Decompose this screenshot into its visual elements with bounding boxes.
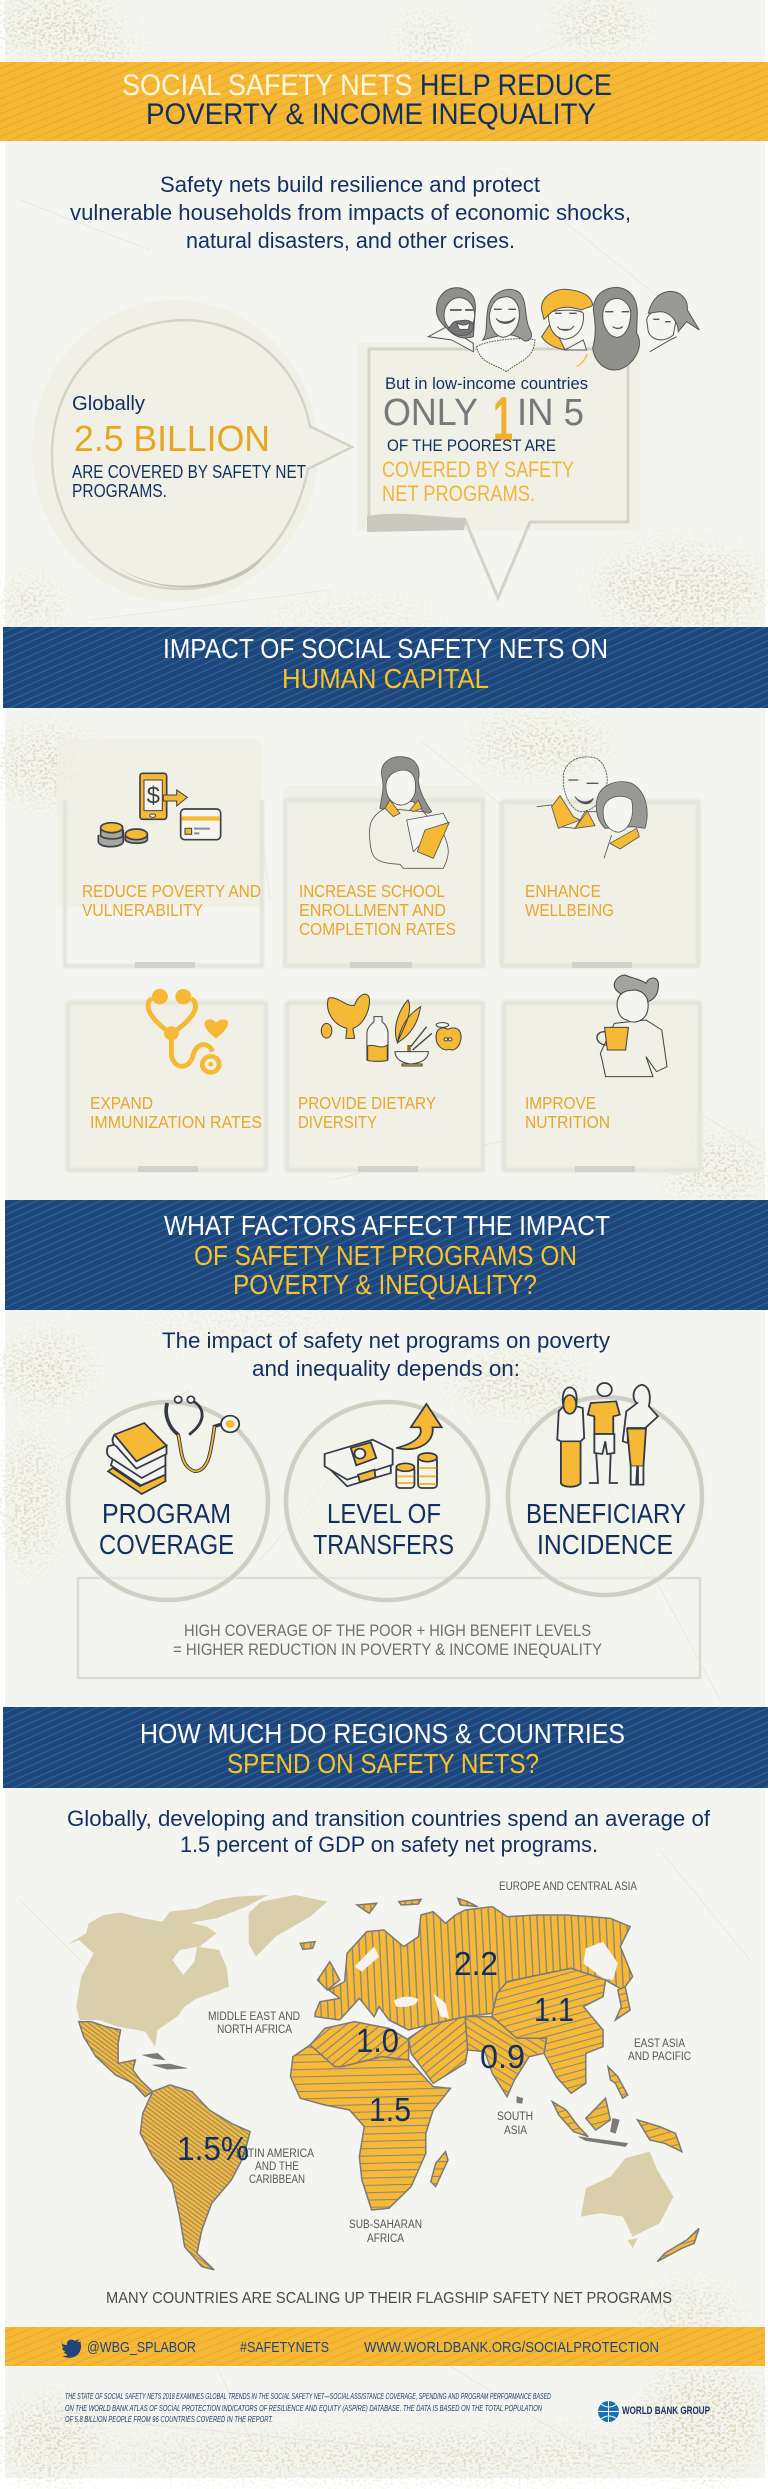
text: covered yellow: COVERED BY SAFETY (382, 457, 574, 482)
world map (66, 1895, 699, 2270)
map: North America, Greenland, Australia (66, 1895, 673, 2248)
label: LEVEL OF (327, 1498, 441, 1529)
intro: spending: 1.5 percent of GDP on safety net programs. (180, 1832, 598, 1857)
text: only 1 in 5: 1 (493, 385, 513, 454)
map labels: AFRICA (367, 2233, 404, 2245)
icon: cash, coins, arrow (325, 1404, 442, 1488)
label (299, 881, 456, 939)
text: scaling up: MANY COUNTRIES ARE SCALING UP THEIR FLAGSHIP SAFETY NET PROGRAMS (106, 2290, 672, 2307)
callout: global coverage bubble (32, 300, 352, 602)
panel: program coverage (63, 1396, 273, 1603)
face: headscarf woman (647, 291, 699, 352)
map labels: LATIN AMERICA (236, 2148, 314, 2160)
title line 1: SOCIAL SAFETY NETS HELP REDUCE (122, 69, 612, 102)
icon: food group (321, 994, 461, 1066)
intro text: vulnerable households from impacts of economic shocks, (70, 200, 631, 225)
panel: level of transfers (282, 1398, 492, 1604)
footer band (5, 2327, 765, 2366)
callout: low-income speech bubble (357, 343, 640, 598)
label: COMPLETION RATES (299, 919, 456, 939)
map labels: NORTH AFRICA (217, 2024, 292, 2036)
map labels: SOUTH (497, 2111, 533, 2123)
label: EXPAND (90, 1093, 153, 1113)
banner: title (0, 62, 768, 141)
heading line 2: OF SAFETY NET PROGRAMS ON (194, 1240, 577, 1271)
map: Europe and Central Asia 2.2 (300, 1898, 633, 2030)
map: South Asia 0.9 (465, 2017, 546, 2103)
icon: books and stethoscope (107, 1396, 239, 1494)
label: TRANSFERS (313, 1529, 454, 1560)
map labels (208, 1881, 691, 2245)
intro: spending (67, 1806, 711, 1857)
map: Africa 1.5 (290, 2045, 450, 2210)
map values: 0.9 (480, 2038, 525, 2075)
logo: World Bank Group (598, 2401, 710, 2422)
panel: school enrollment (283, 757, 485, 968)
label: ENROLLMENT AND (299, 900, 446, 920)
icon: girl with books (369, 757, 449, 868)
icon: three people (557, 1383, 658, 1487)
icon: five faces (428, 287, 699, 372)
label: IMPROVE (525, 1093, 596, 1113)
face: yellow turban (542, 289, 593, 350)
panel: improve nutrition (500, 975, 702, 1173)
label (90, 1093, 262, 1132)
map values (177, 1945, 574, 2167)
map: Latin America 1.5% (79, 2022, 250, 2270)
label: VULNERABILITY (82, 900, 203, 920)
face: woman in hijab (593, 287, 639, 370)
label: PROVIDE DIETARY (298, 1093, 436, 1113)
map: Middle East and North Africa 1.0 (310, 2017, 468, 2083)
label: BENEFICIARY (526, 1498, 686, 1529)
fine print: ON THE WORLD BANK ATLAS OF SOCIAL PROTECTION INDICATORS OF RESILIENCE AND EQUITY (ASPIRE) DATABASE. THE DATA IS BASED ON THE TOTAL POPULATION (65, 2403, 543, 2413)
map: East Asia and Pacific 1.1 (492, 1968, 699, 2262)
label: NUTRITION (525, 1112, 610, 1132)
handles: WWW.WORLDBANK.ORG/SOCIALPROTECTION (364, 2339, 659, 2356)
formula text: HIGH COVERAGE OF THE POOR + HIGH BENEFIT LEVELS (184, 1621, 591, 1640)
intro: spending: Globally, developing and transition countries spend an average of (67, 1806, 711, 1831)
panel: dietary diversity (283, 994, 485, 1173)
banner: spending (3, 1707, 768, 1788)
map labels: ASIA (504, 2125, 527, 2137)
heading line 2: HUMAN CAPITAL (282, 663, 489, 694)
label: DIVERSITY (298, 1112, 377, 1132)
heading line 1: WHAT FACTORS AFFECT THE IMPACT (164, 1210, 610, 1241)
label: PROGRAM (102, 1498, 231, 1529)
map values: 1.5% (177, 2130, 249, 2167)
label (298, 1093, 436, 1132)
text: covered: PROGRAMS. (72, 481, 167, 501)
icon: money transfer (98, 773, 221, 847)
banner: human capital (3, 627, 768, 708)
intro text: Safety nets build resilience and protect (160, 172, 540, 197)
label (99, 1498, 234, 1560)
label (525, 881, 614, 920)
text: covered yellow (382, 457, 574, 506)
formula text: = HIGHER REDUCTION IN POVERTY & INCOME INEQUALITY (173, 1640, 602, 1659)
swoosh accent (577, 354, 587, 367)
face: man with beard (428, 288, 475, 352)
label: WELLBEING (525, 900, 614, 920)
icon: stethoscope and heart (148, 991, 228, 1072)
logo: World Bank Group: WORLD BANK GROUP (622, 2405, 710, 2417)
face: smiling woman (477, 289, 535, 372)
text: only 1 in 5 (383, 385, 584, 454)
text: only 1 in 5: IN 5 (517, 392, 584, 434)
map values: 1.5 (369, 2091, 411, 2128)
label: INCIDENCE (537, 1529, 673, 1560)
label (525, 1093, 610, 1132)
fine print (65, 2391, 551, 2424)
map labels: AND PACIFIC (628, 2051, 691, 2063)
text: covered: ARE COVERED BY SAFETY NET (72, 462, 306, 482)
handles: @WBG_SPLABOR (87, 2339, 196, 2356)
handles (87, 2339, 659, 2356)
label: INCREASE SCHOOL (299, 881, 445, 901)
panel: expand immunization (64, 991, 268, 1173)
fine print: OF 5.8 BILLION PEOPLE FROM 96 COUNTRIES COVERED IN THE REPORT. (65, 2414, 273, 2424)
label (313, 1498, 454, 1560)
heading line 3: POVERTY & INEQUALITY? (233, 1269, 537, 1300)
label: IMMUNIZATION RATES (90, 1112, 262, 1132)
icon: elderly couple (537, 757, 647, 858)
text: of the poorest: OF THE POOREST ARE (387, 436, 556, 455)
icon: child drinking (597, 975, 667, 1077)
intro: depends on: The impact of safety net programs on poverty (162, 1328, 610, 1353)
map values: 1.1 (534, 1991, 574, 2028)
intro text: natural disasters, and other crises. (186, 228, 515, 253)
title line 2: POVERTY & INCOME INEQUALITY (146, 98, 596, 131)
icon: twitter bird (62, 2339, 81, 2358)
banner: factors (5, 1200, 768, 1310)
panel: enhance wellbeing (498, 757, 702, 968)
heading line 1: IMPACT OF SOCIAL SAFETY NETS ON (163, 633, 608, 664)
text: covered yellow: NET PROGRAMS. (382, 481, 535, 506)
map labels: AND THE (255, 2161, 299, 2173)
label: ENHANCE (525, 881, 601, 901)
formula text (173, 1621, 602, 1659)
label (82, 881, 261, 920)
intro text (70, 172, 631, 253)
intro: depends on (162, 1328, 610, 1381)
panel: reduce poverty (57, 739, 262, 968)
map values: 2.2 (454, 1945, 498, 1982)
label (526, 1498, 686, 1560)
text: only 1 in 5: ONLY (383, 392, 478, 434)
map labels: EUROPE AND CENTRAL ASIA (499, 1881, 637, 1893)
label: REDUCE POVERTY AND (82, 881, 261, 901)
text: Globally: Globally (72, 393, 145, 415)
icon: money transfer: $ (147, 783, 160, 810)
map labels: MIDDLE EAST AND (208, 2011, 300, 2023)
map labels: SUB-SAHARAN (349, 2219, 422, 2231)
map labels: CARIBBEAN (249, 2174, 305, 2186)
text: covered (72, 462, 306, 501)
map labels: EAST ASIA (634, 2038, 685, 2050)
handles: #SAFETYNETS (240, 2339, 329, 2356)
heading line 1: HOW MUCH DO REGIONS & COUNTRIES (140, 1718, 625, 1749)
text: 2.5 billion: 2.5 BILLION (74, 418, 270, 459)
map values: 1.0 (356, 2022, 399, 2059)
panel: formula box (78, 1578, 700, 1678)
text: low-income: But in low-income countries (385, 374, 588, 393)
intro: depends on: and inequality depends on: (252, 1356, 520, 1381)
panel: beneficiary incidence (502, 1383, 708, 1599)
heading line 2: SPEND ON SAFETY NETS? (227, 1748, 539, 1779)
label: COVERAGE (99, 1529, 234, 1560)
